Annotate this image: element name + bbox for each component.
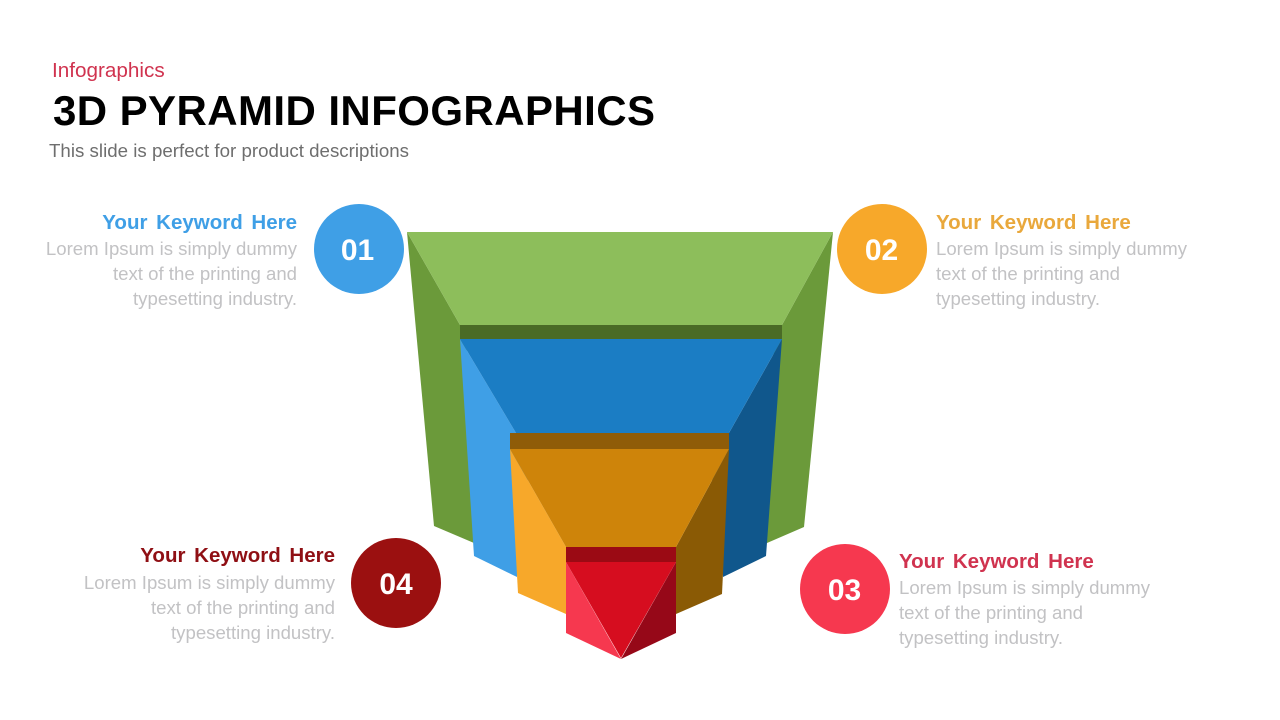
title: 3D PYRAMID INFOGRAPHICS — [53, 87, 655, 134]
text block 03: typesetting industry. — [899, 627, 1063, 648]
text block 04: typesetting industry. — [171, 622, 335, 643]
text block 02: typesetting industry. — [936, 288, 1100, 309]
text block 03: text of the printing and — [899, 602, 1083, 623]
number badge 03: 03 — [828, 574, 861, 607]
number badge 04 — [351, 538, 441, 628]
text block 04 — [84, 544, 336, 643]
callout 02 — [837, 204, 1188, 309]
pyramid tier 1: green — [407, 232, 833, 543]
number badge 02: 02 — [865, 234, 898, 267]
text block 01: text of the printing and — [113, 263, 297, 284]
number badge 04: 04 — [379, 568, 413, 601]
callout 01 — [46, 204, 404, 309]
callout 03 — [800, 544, 1151, 648]
eyebrow label: Infographics — [52, 59, 165, 82]
text block 03: Lorem Ipsum is simply dummy — [899, 577, 1151, 598]
text block 01: Your Keyword Here — [102, 211, 297, 234]
number badge 01: 01 — [341, 234, 374, 267]
pyramid tier 3: orange — [510, 449, 729, 614]
3D pyramid chart — [407, 232, 833, 659]
text block 04: text of the printing and — [151, 597, 335, 618]
text block 02: text of the printing and — [936, 263, 1120, 284]
text block 02: Your Keyword Here — [936, 211, 1131, 234]
pyramid tier 4: red — [566, 562, 676, 659]
subtitle: This slide is perfect for product descriptions — [49, 140, 409, 161]
text block 02: Lorem Ipsum is simply dummy — [936, 238, 1188, 259]
text block 01: typesetting industry. — [133, 288, 297, 309]
text block 03: Your Keyword Here — [899, 550, 1094, 573]
text block 04: Your Keyword Here — [140, 544, 335, 567]
text block 01: Lorem Ipsum is simply dummy — [46, 238, 298, 259]
text block 01 — [46, 211, 298, 309]
text block 02 — [936, 211, 1188, 309]
text block 03 — [899, 550, 1151, 648]
callout 04 — [84, 538, 441, 643]
number badge 02 — [837, 204, 927, 294]
pyramid tier 2: blue — [460, 339, 782, 577]
number badge 03 — [800, 544, 890, 634]
number badge 01 — [314, 204, 404, 294]
text block 04: Lorem Ipsum is simply dummy — [84, 572, 336, 593]
